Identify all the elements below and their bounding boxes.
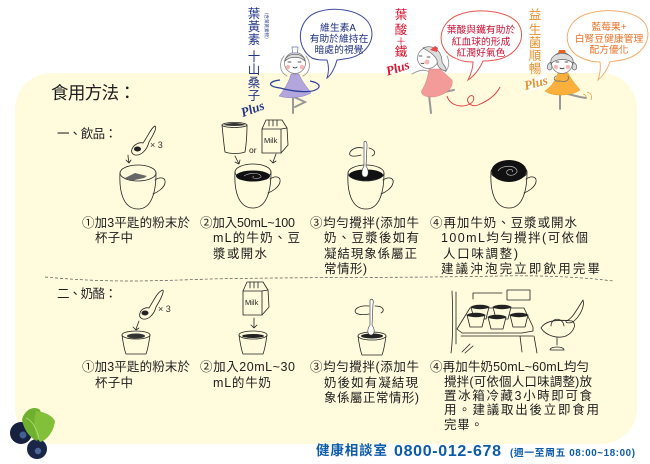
step text: drink step 4: 人口味調整): [443, 246, 518, 261]
icon: spoon times three: × 3: [150, 140, 163, 150]
step text: pudding step 3: 奶後如有凝結現: [324, 376, 418, 390]
step text: drink step 4: 建議沖泡完立即飲用完畢: [441, 261, 600, 276]
footer: contact line: (週一至周五 08:00~18:00): [510, 446, 635, 459]
label: lutein plus mulberry: 桑: [248, 76, 260, 90]
speech bubble: vitamin A: [300, 9, 372, 78]
speech bubble: berries: 白腎豆健康管理: [575, 32, 643, 45]
step text: pudding step 1: ①加3平匙的粉末於: [82, 359, 190, 374]
footer: contact line: [316, 442, 635, 460]
label: folic acid plus iron: 鐵: [395, 44, 408, 59]
footer: contact line: 0800-012-678: [394, 443, 501, 460]
speech bubble: vitamin A: 暗處的視覺: [315, 43, 364, 56]
step text: pudding step 3: [310, 359, 419, 405]
icon: purple dancer: [271, 47, 319, 113]
step text: pudding step 3: 象係屬正常情形): [324, 390, 419, 405]
label: lutein plus mulberry: 素: [248, 33, 260, 47]
step text: drink step 1: 杯子中: [95, 230, 133, 245]
step text: pudding step 2: mL的牛奶: [213, 375, 271, 390]
footer: contact line: 健康相談室: [316, 442, 387, 458]
speech bubble: berries: 配方優化: [589, 43, 629, 56]
icon: orange dancer: [545, 50, 592, 109]
step text: drink step 3: ③均勻攪拌(添加牛: [310, 215, 419, 230]
step text: drink step 1: ①加3平匙的粉末於: [82, 215, 190, 230]
speech bubble: berries: 藍莓果+: [591, 20, 627, 33]
icon: mug stirred with spoon: [348, 141, 393, 209]
step text: drink step 3: 常情形): [324, 262, 367, 276]
label: lutein plus mulberry: 山: [248, 63, 260, 77]
icon: blueberries and leaves: [10, 408, 55, 459]
icon: refrigerator with cups and dessert: [451, 290, 583, 353]
speech bubble: folic acid and iron: [441, 11, 522, 80]
label: folic acid plus iron: [384, 8, 411, 79]
icon: milk carton and small cup: [239, 282, 269, 354]
step text: drink step 3: 凝結現象係屬正: [324, 246, 417, 261]
character 1: purple dancer with vitamin bubble: [239, 7, 372, 120]
label: lutein plus mulberry: 十: [248, 50, 260, 64]
label: probiotics: [522, 8, 549, 93]
character 2: pink dancer with folic acid bubble: [384, 8, 522, 113]
step text: drink step 4: 100mL均勻攪拌(可依個: [441, 230, 588, 245]
icon: glass and milk carton: or: [249, 145, 257, 155]
label: probiotics: 暢: [529, 61, 541, 76]
title: 食用方法：: [51, 83, 136, 103]
label: folic acid plus iron: 酸: [395, 22, 408, 37]
speech bubble: berries: [567, 11, 648, 80]
step text: pudding step 3: ③均勻攪拌(添加牛: [310, 359, 419, 374]
label: lutein plus mulberry: 黃: [248, 20, 260, 34]
step text: drink step 2: ②加入50mL~100: [200, 216, 295, 230]
label: probiotics: 順: [529, 49, 542, 63]
label: folic acid plus iron: 葉: [395, 8, 407, 22]
label: folic acid plus iron: Plus: [384, 57, 411, 79]
step text: pudding step 4: [430, 359, 599, 432]
step text: drink step 4: ④再加牛奶、豆漿或開水: [430, 215, 577, 230]
icon: spoon and small cup with powder: [122, 290, 171, 354]
speech bubble: vitamin A: 有助於維持在: [310, 32, 369, 45]
icon: finished mug: [491, 160, 536, 208]
speech bubble: folic acid and iron: 紅血球的形成: [452, 35, 511, 48]
step text: drink step 3: [310, 215, 419, 276]
step text: pudding step 2: [200, 360, 295, 390]
label: lutein plus mulberry: [239, 7, 270, 120]
icon: small cup stirred with spoon: [355, 299, 386, 355]
label: folic acid plus iron: ＋: [396, 37, 406, 48]
icon: mug with dark liquid: [235, 164, 280, 208]
step text: drink step 2: 漿或開水: [213, 246, 267, 261]
step text: pudding step 4: 完畢。: [444, 417, 483, 432]
label: probiotics: Plus: [522, 72, 549, 93]
step text: pudding step 1: 杯子中: [95, 375, 133, 390]
label: probiotics: 生: [529, 23, 541, 37]
character 3: orange dancer with berry bubble: [522, 8, 648, 109]
icon: spoon times three: [126, 126, 163, 163]
speech bubble: folic acid and iron: 紅潤好氣色: [457, 46, 506, 59]
label: probiotics: 益: [529, 8, 541, 22]
step text: drink step 4: [430, 215, 600, 276]
label: lutein plus mulberry: （含葉黃素物）: [263, 10, 270, 42]
speech bubble: vitamin A: 維生素A: [320, 21, 356, 34]
panel: cream background: [15, 73, 637, 444]
icon: pink dancer: [412, 46, 500, 113]
label: lutein plus mulberry: 葉: [248, 7, 260, 21]
step text: pudding step 4: ④再加牛奶50mL~60mL均勻: [430, 359, 589, 374]
step text: drink step 2: [200, 216, 300, 261]
step text: pudding step 4: 置冰箱冷藏3小時即可食: [444, 388, 592, 403]
section heading: pudding: 二、奶酪：: [57, 287, 117, 301]
section heading: drinks: 一、飲品：: [57, 126, 117, 141]
step text: pudding step 2: ②加入20mL~30: [200, 360, 295, 374]
step text: drink step 3: 奶、豆漿後如有: [324, 230, 419, 245]
step text: drink step 2: mL的牛奶、豆: [213, 230, 300, 245]
step text: pudding step 4: 攪拌(可依個人口味調整)放: [444, 374, 592, 389]
label: lutein plus mulberry: 子: [248, 89, 260, 103]
step text: pudding step 1: [82, 359, 190, 390]
label: lutein plus mulberry: Plus: [239, 98, 266, 120]
speech bubble: folic acid and iron: 葉酸與鐵有助於: [447, 23, 515, 36]
label: probiotics: 菌: [529, 36, 541, 50]
icon: mug with powder: [120, 165, 165, 209]
step text: pudding step 4: 用。建議取出後立即食用: [444, 402, 599, 417]
icon: spoon and small cup with powder: × 3: [158, 304, 171, 314]
icon: glass and milk carton: [222, 120, 288, 164]
step text: drink step 1: [82, 215, 190, 245]
